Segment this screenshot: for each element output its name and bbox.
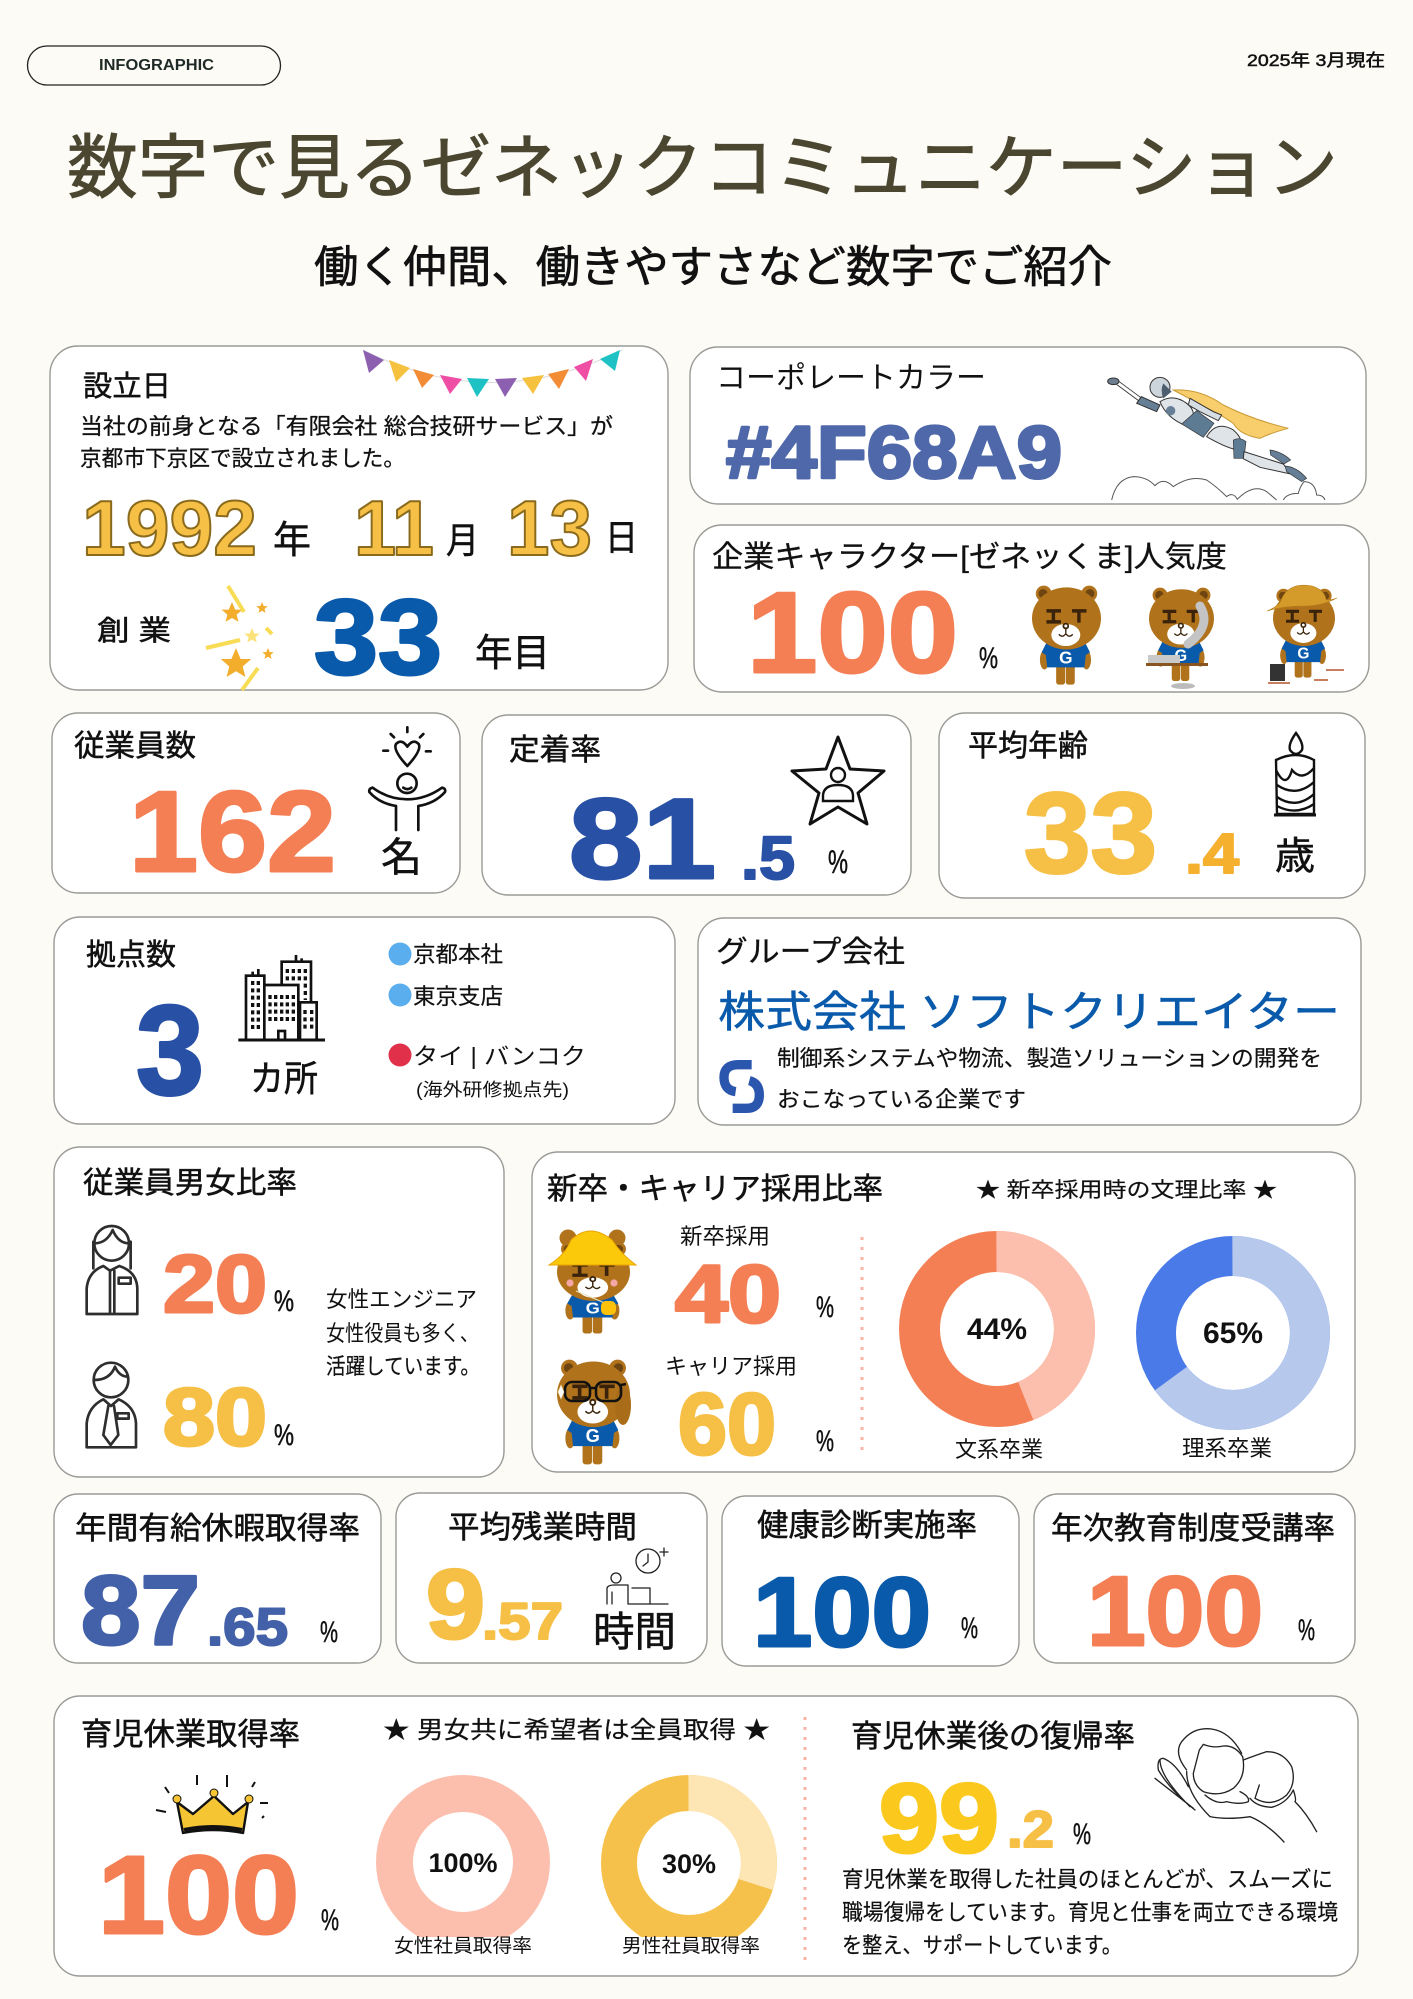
value: 20%: % — [274, 1285, 294, 1318]
icon: person at laptop with clock — [607, 1548, 668, 1604]
chart: men donut 30% — [619, 1793, 759, 1933]
text: description — [842, 1867, 1338, 1958]
heading: グループ会社: グループ会社 — [716, 936, 905, 969]
label: 女性社員取得率 — [370, 1935, 560, 1957]
value: 87.65%: 87 — [81, 1555, 200, 1665]
date: 1992年11月13日: 日 — [605, 517, 638, 558]
heading: 拠点数: 拠点数 — [86, 939, 176, 972]
number: 33: 33 — [314, 577, 442, 697]
text: description: 制御系システムや物流、製造ソリューションの開発を — [777, 1046, 1322, 1071]
label: 女性社員取得率: 女性社員取得率 — [394, 1935, 532, 1957]
panel: average age — [939, 713, 1365, 898]
number: 3: 3 — [136, 979, 204, 1121]
subtitle: 働く仲間、働きやすさなど数字でご紹介 — [314, 243, 1112, 292]
icon: person with heart — [369, 727, 445, 830]
unit: 歳: 歳 — [1275, 836, 1315, 878]
panel: retention rate — [482, 715, 911, 903]
date: 1992年11月13日: 1992 — [82, 484, 257, 572]
date: 1992年11月13日: 月 — [446, 520, 479, 561]
icon: bear with glasses — [557, 1360, 631, 1464]
value: 87.65%: .65 — [207, 1598, 288, 1657]
heading: 定着率: 定着率 — [509, 734, 601, 767]
text: description — [80, 414, 613, 471]
value: 80%: 80 — [163, 1372, 267, 1463]
company name: 株式会社 ソフトクリエイター — [718, 989, 1340, 1037]
chart: humanities donut 44%: 44% — [967, 1313, 1027, 1346]
date note: 2025年 3月現在 — [1247, 51, 1385, 70]
location: Bangkok — [388, 1043, 586, 1100]
label: 文系卒業: 文系卒業 — [955, 1437, 1043, 1462]
label: 創業: 創 業 — [97, 615, 171, 646]
value: 99.2%: % — [1073, 1818, 1091, 1851]
chart: humanities donut 44% — [920, 1252, 1074, 1406]
heading: 新卒・キャリア採用比率: 新卒・キャリア採用比率 — [547, 1173, 883, 1206]
heading: 育児休業後の復帰率: 育児休業後の復帰率 — [851, 1719, 1135, 1754]
icon: candle — [1274, 733, 1316, 815]
icon: crown — [156, 1775, 268, 1833]
chart: women donut 100% — [394, 1794, 532, 1930]
text: description: 京都市下京区で設立されました。 — [80, 446, 405, 471]
text: description: 当社の前身となる「有限会社 総合技研サービス」が — [80, 414, 613, 439]
label: 新卒採用: 新卒採用 — [680, 1224, 770, 1249]
value: 60%: 60 — [678, 1376, 776, 1473]
text: female engineers note: 女性役員も多く、 — [326, 1321, 479, 1346]
value: 100%: 100 — [98, 1834, 299, 1957]
unit: percent: % — [828, 844, 848, 880]
unit: 名: 名 — [381, 836, 422, 880]
value: 99.2%: .2 — [1007, 1801, 1054, 1859]
value: 9.57 — [426, 1549, 563, 1659]
panel: company character popularity — [694, 525, 1369, 697]
panel: recruitment ratio — [532, 1152, 1355, 1473]
chart: men donut 30%: 30% — [662, 1849, 716, 1879]
heading: 健康診断実施率: 健康診断実施率 — [757, 1508, 977, 1543]
icon: baby in hand — [1155, 1729, 1317, 1842]
panel: founding date — [50, 346, 668, 697]
icon: woman — [87, 1226, 137, 1314]
value: 87.65% — [81, 1555, 338, 1665]
illustration: flying robot — [1108, 377, 1325, 500]
heading: 平均残業時間: 平均残業時間 — [448, 1510, 637, 1545]
icon: bunting flags — [363, 350, 622, 397]
heading: コーポレートカラー: コーポレートカラー — [716, 362, 986, 395]
heading: 年間有給休暇取得率: 年間有給休暇取得率 — [75, 1511, 360, 1546]
value: 9.57: .57 — [482, 1593, 563, 1651]
number: 33: 33 — [1024, 770, 1157, 897]
value: 60% — [678, 1376, 834, 1473]
value: 87.65%: % — [320, 1616, 338, 1649]
heading: 従業員数: 従業員数 — [74, 730, 196, 763]
icon: sparkling stars — [206, 586, 274, 690]
value: 100%: % — [321, 1904, 339, 1937]
panel: group company — [698, 918, 1361, 1125]
value: 100%: % — [1298, 1614, 1315, 1647]
panel: paid leave — [54, 1494, 381, 1665]
panel: health checks — [722, 1496, 1019, 1667]
unit: 時間: 時間 — [593, 1609, 676, 1655]
pill label: INFOGRAPHIC: INFOGRAPHIC — [99, 57, 214, 74]
number: 162: 162 — [129, 769, 336, 896]
panel: employees — [52, 713, 460, 896]
unit: 年目: 年目 — [475, 633, 550, 675]
icon: bear with helmet — [549, 1230, 636, 1334]
text: description: 職場復帰をしています。育児と仕事を両立できる環境 — [842, 1900, 1338, 1925]
icon: bear with hat — [1267, 585, 1344, 683]
subheading: humanities/science ratio: ★ 新卒採用時の文理比率 ★ — [976, 1179, 1277, 1202]
icon: bear waving — [1032, 586, 1101, 685]
heading: 年次教育制度受講率: 年次教育制度受講率 — [1051, 1511, 1335, 1546]
number: 81: 81 — [569, 776, 716, 903]
text: female engineers note: 女性エンジニア — [326, 1287, 477, 1312]
heading: 設立日: 設立日 — [83, 370, 171, 403]
panel: overtime — [396, 1493, 707, 1663]
icon: bear on phone — [1146, 588, 1214, 689]
value: 40%: % — [816, 1291, 834, 1324]
icon: buildings — [238, 955, 325, 1040]
text: description: おこなっている企業です — [777, 1087, 1026, 1112]
icon: man — [87, 1363, 136, 1447]
label: 男性社員取得率 — [596, 1935, 786, 1957]
chart: women donut 100%: 100% — [428, 1848, 498, 1878]
panel: corporate colour — [690, 347, 1366, 504]
label: 理系卒業: 理系卒業 — [1182, 1436, 1272, 1461]
text: description: を整え、サポートしています。 — [842, 1933, 1122, 1958]
value: 99.2%: 99 — [879, 1763, 999, 1873]
panel: childcare leave — [54, 1696, 1358, 1976]
date: 1992年11月13日 — [82, 484, 638, 572]
value: 100%: 100 — [753, 1557, 931, 1667]
heading: 平均年齢: 平均年齢 — [968, 730, 1088, 763]
value: 100%: 100 — [1087, 1556, 1263, 1666]
colour code: #4F68A9 — [726, 411, 1062, 494]
location: Kyoto: 京都本社 — [413, 942, 503, 967]
value: 60%: % — [816, 1425, 834, 1458]
chart: science donut 65% — [1156, 1256, 1310, 1410]
heading: 育児休業取得率: 育児休業取得率 — [81, 1717, 300, 1752]
label: 男性社員取得率: 男性社員取得率 — [622, 1935, 760, 1957]
icon: company logo S — [724, 1065, 759, 1108]
value: 20%: 20 — [163, 1239, 267, 1330]
value: 100%: % — [961, 1612, 978, 1645]
value: 20% — [163, 1239, 294, 1330]
unit: カ所: カ所 — [250, 1058, 318, 1099]
panel: annual training — [1034, 1494, 1355, 1666]
number: 100: 100 — [747, 570, 958, 697]
location: Bangkok: (海外研修拠点先) — [416, 1080, 569, 1100]
text: description: 育児休業を取得した社員のほとんどが、スムーズに — [842, 1867, 1333, 1892]
title: 数字で見るゼネックコミュニケーション — [67, 129, 1338, 207]
value: 40%: 40 — [675, 1249, 781, 1340]
location: Bangkok: タイ | バンコク — [413, 1043, 586, 1069]
panel: gender ratio — [54, 1147, 504, 1477]
date: 1992年11月13日: 年 — [273, 520, 311, 562]
heading: 従業員男女比率: 従業員男女比率 — [83, 1167, 297, 1200]
text: description — [777, 1046, 1322, 1112]
text: female engineers note: 活躍しています。 — [326, 1354, 480, 1379]
decimal: .5: .5 — [741, 824, 795, 892]
chart: science donut 65%: 65% — [1203, 1317, 1263, 1350]
value: 9.57: 9 — [426, 1549, 485, 1659]
value: 80%: % — [274, 1419, 294, 1452]
subheading: all applicants took leave: ★ 男女共に希望者は全員取得 ★ — [383, 1717, 770, 1744]
text: female engineers note — [326, 1287, 480, 1379]
icon: star with person — [792, 737, 884, 824]
label: キャリア採用: キャリア採用 — [665, 1354, 797, 1379]
location: Tokyo: 東京支店 — [413, 984, 503, 1009]
decimal: .4: .4 — [1185, 822, 1239, 886]
value: 99.2% — [879, 1763, 1091, 1873]
value: 40% — [675, 1249, 834, 1340]
date: 1992年11月13日: 11 — [354, 484, 434, 572]
date: 1992年11月13日: 13 — [507, 484, 592, 572]
heading: 企業キャラクター人気度: 企業キャラクター[ゼネッくま]人気度 — [712, 541, 1227, 574]
unit: percent: % — [979, 642, 998, 675]
value: 80% — [163, 1372, 294, 1463]
panel: locations — [54, 917, 675, 1124]
pill label: INFOGRAPHIC — [28, 46, 280, 85]
